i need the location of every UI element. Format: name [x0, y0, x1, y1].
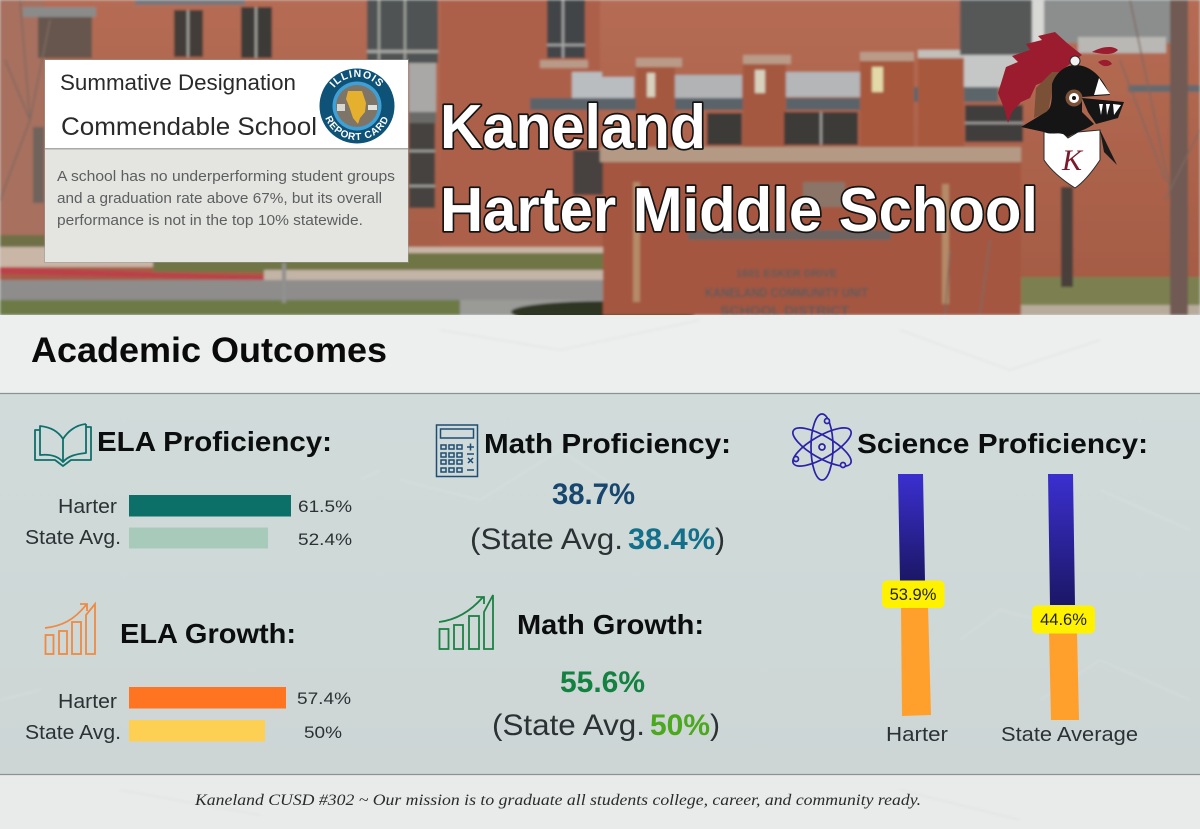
chart: state average science bar	[1001, 474, 1138, 746]
stat: state math proficiency: )	[715, 523, 725, 556]
heading: Math Growth:	[517, 609, 704, 640]
panel: math growth	[439, 595, 720, 742]
bar chart: ELA growth: 57.4%	[297, 689, 351, 708]
chart: Harter science bar: Harter	[886, 724, 948, 746]
band: footer background	[0, 775, 1200, 829]
heading: Science Proficiency:	[857, 428, 1148, 459]
bar chart: ELA growth: Harter	[58, 691, 117, 713]
stat: state math growth	[492, 709, 720, 742]
panel: science proficiency	[788, 414, 1148, 746]
chart: state average science bar: 44.6%	[1040, 611, 1087, 629]
heading: ELA Growth:	[120, 618, 296, 649]
title	[440, 93, 1038, 245]
stat: Harter math growth: 55.6%	[560, 666, 645, 699]
panel: main metrics background	[0, 393, 1200, 774]
bar chart: ELA proficiency	[25, 495, 352, 549]
bar chart: ELA growth: State Avg.	[25, 722, 121, 744]
chart: Harter science bar	[882, 474, 948, 746]
bar chart: ELA growth: 50%	[304, 723, 342, 742]
title: Kaneland	[440, 93, 706, 162]
panel: summative designation card	[44, 59, 409, 263]
hero photo: school building: 1601 ESKER DRIVE	[736, 268, 837, 280]
icon: Illinois Report Card seal	[320, 68, 394, 144]
hero photo: school building: KANELAND COMMUNITY UNIT	[705, 285, 868, 300]
bar chart: ELA proficiency: 61.5%	[298, 497, 352, 516]
icon: green growth chart	[439, 595, 493, 649]
bar chart: ELA proficiency: 52.4%	[298, 530, 352, 549]
bar chart: ELA growth	[25, 687, 351, 744]
heading: ELA Proficiency:	[97, 426, 332, 457]
title: Harter Middle School	[440, 176, 1038, 245]
designation value: Commendable School	[61, 113, 317, 141]
panel: math proficiency	[436, 425, 731, 556]
band: section heading background	[0, 315, 1200, 393]
stat: state math growth: 50%	[650, 709, 710, 742]
icon: Illinois Report Card seal: ILLINOIS	[329, 70, 384, 88]
icon: knight mascot logo	[998, 32, 1124, 188]
stat: state math proficiency: (State Avg.	[470, 523, 623, 556]
footer mission statement: Kaneland CUSD #302 ~ Our mission is to graduate all students college, career, and community ready.	[194, 792, 921, 809]
chart: state average science bar: State Average	[1001, 724, 1138, 746]
chart: Harter science bar: 53.9%	[890, 586, 937, 604]
designation description: and a graduation rate above 67%, but its overall	[57, 191, 382, 207]
stat: state math growth: (State Avg.	[492, 709, 645, 742]
panel: ELA growth	[25, 604, 351, 744]
designation description: performance is not in the top 10% statewide.	[57, 213, 363, 229]
hero photo: school building: SCHOOL DISTRICT	[720, 303, 849, 318]
designation description: A school has no underperforming student groups	[57, 169, 395, 185]
hero photo: school building	[0, 0, 1200, 323]
stat: state math growth: )	[710, 709, 720, 742]
designation description	[57, 169, 395, 229]
panel: ELA proficiency	[25, 424, 352, 549]
stat: Harter math proficiency: 38.7%	[552, 478, 635, 511]
heading: Math Proficiency:	[484, 428, 731, 459]
stat: state math proficiency: 38.4%	[628, 523, 715, 556]
icon: atom	[788, 414, 856, 480]
icon: knight mascot logo: K	[1061, 144, 1084, 177]
icon: Illinois Report Card seal: REPORT CARD	[325, 116, 388, 140]
bar chart: ELA proficiency: State Avg.	[25, 527, 121, 549]
designation label: Summative Designation	[60, 70, 296, 95]
heading: Academic Outcomes: Academic Outcomes	[31, 331, 387, 370]
icon: calculator	[436, 425, 478, 476]
bar chart: ELA proficiency: Harter	[58, 496, 117, 518]
icon: orange growth chart	[45, 604, 95, 654]
icon: open book	[35, 424, 91, 466]
stat: state math proficiency	[470, 523, 725, 556]
